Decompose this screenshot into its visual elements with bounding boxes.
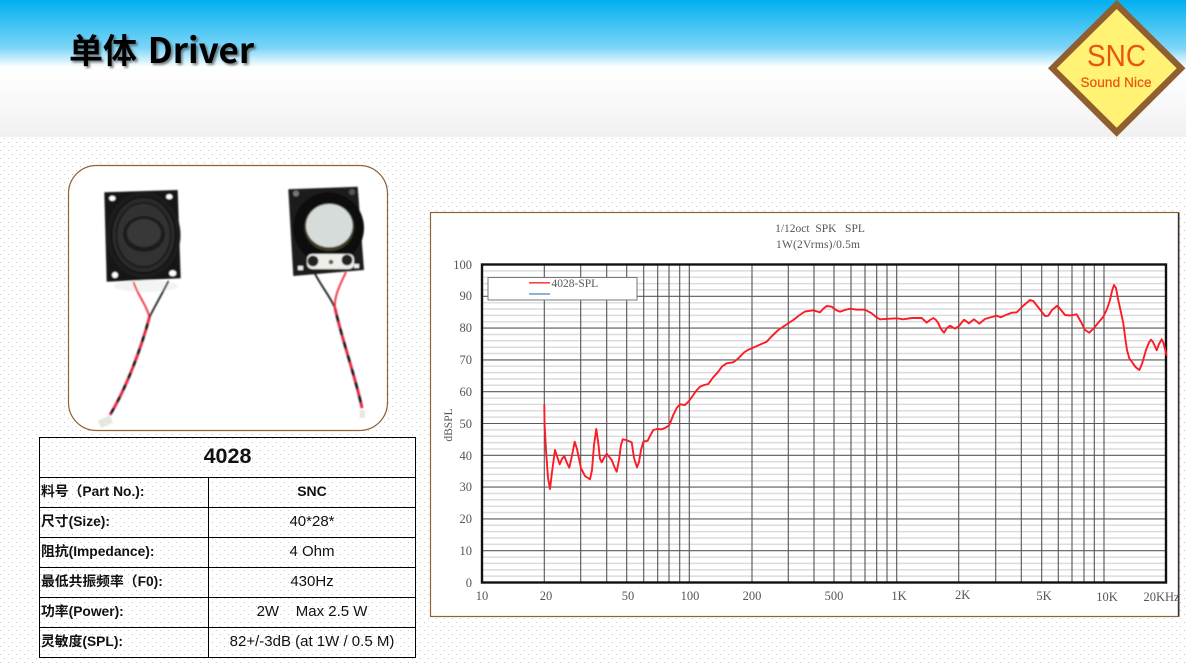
y axis labels: 50	[460, 417, 472, 431]
x axis labels: 200	[743, 589, 761, 603]
model heading row: 阻抗(Impedance):	[41, 544, 154, 559]
chart title: 1/12oct SPK SPL	[775, 223, 865, 235]
y axis labels: 70	[460, 353, 472, 367]
x axis labels: 1K	[891, 589, 907, 603]
y axis labels: 80	[460, 321, 472, 335]
photo: speaker back with wire	[288, 187, 365, 418]
x axis labels: 20	[540, 589, 552, 603]
legend	[488, 278, 637, 300]
y axis labels: 60	[460, 385, 472, 399]
spec table	[39, 437, 416, 658]
x axis labels: 500	[825, 589, 843, 603]
model heading row: 82+/-3dB (at 1W / 0.5 M)	[230, 632, 394, 650]
x axis labels: 10	[476, 589, 488, 603]
y axis labels: 90	[460, 289, 472, 303]
logo: SNC diamond	[1048, 0, 1186, 137]
model heading row	[41, 444, 394, 650]
y axis labels	[453, 258, 472, 590]
chart title	[775, 223, 865, 251]
chart title: 1W(2Vrms)/0.5m	[776, 239, 860, 251]
model heading row: 料号（Part No.):	[41, 484, 144, 499]
x axis labels: 50	[622, 589, 634, 603]
model heading row: 40*28*	[289, 512, 335, 530]
y axis labels: 40	[460, 449, 472, 463]
grid lines	[483, 264, 1165, 582]
title: 单体 Driver	[69, 23, 254, 74]
logo: SNC diamond: SNC	[1087, 38, 1146, 73]
x axis labels: 5K	[1036, 589, 1052, 603]
model heading row: 4028	[204, 444, 251, 468]
model heading row: 4 Ohm	[289, 542, 334, 560]
x axis labels: 2K	[955, 588, 970, 602]
model heading row: 尺寸(Size):	[41, 514, 110, 529]
model heading row: 2W Max 2.5 W	[257, 602, 367, 620]
dotted page background	[0, 137, 1186, 666]
y axis labels: 20	[460, 512, 472, 526]
y axis labels: 30	[460, 480, 472, 494]
y axis labels: 100	[453, 258, 472, 272]
model heading row: 灵敏度(SPL):	[41, 634, 123, 649]
photo: speaker front with wire	[98, 190, 181, 428]
x axis labels	[476, 588, 1180, 604]
logo: SNC diamond: Sound Nice	[1080, 75, 1152, 90]
y axis title: dBSPL	[443, 408, 455, 442]
y axis labels: 10	[460, 544, 472, 558]
SPL response curve	[544, 285, 1166, 489]
legend: 4028-SPL	[552, 278, 598, 290]
y axis labels: 0	[466, 576, 472, 590]
model heading row: SNC	[297, 483, 327, 499]
plot frame	[482, 264, 1166, 582]
x axis labels: 20KHz	[1143, 590, 1180, 604]
model heading row: 功率(Power):	[41, 604, 124, 619]
x axis labels: 10K	[1096, 590, 1118, 604]
model heading row: 最低共振频率（F0):	[41, 574, 163, 589]
panel: product photo	[68, 166, 388, 430]
header gradient band	[0, 0, 1186, 137]
model heading row: 430Hz	[290, 572, 334, 590]
x axis labels: 100	[681, 589, 699, 603]
panel: frequency response chart	[430, 212, 1180, 616]
